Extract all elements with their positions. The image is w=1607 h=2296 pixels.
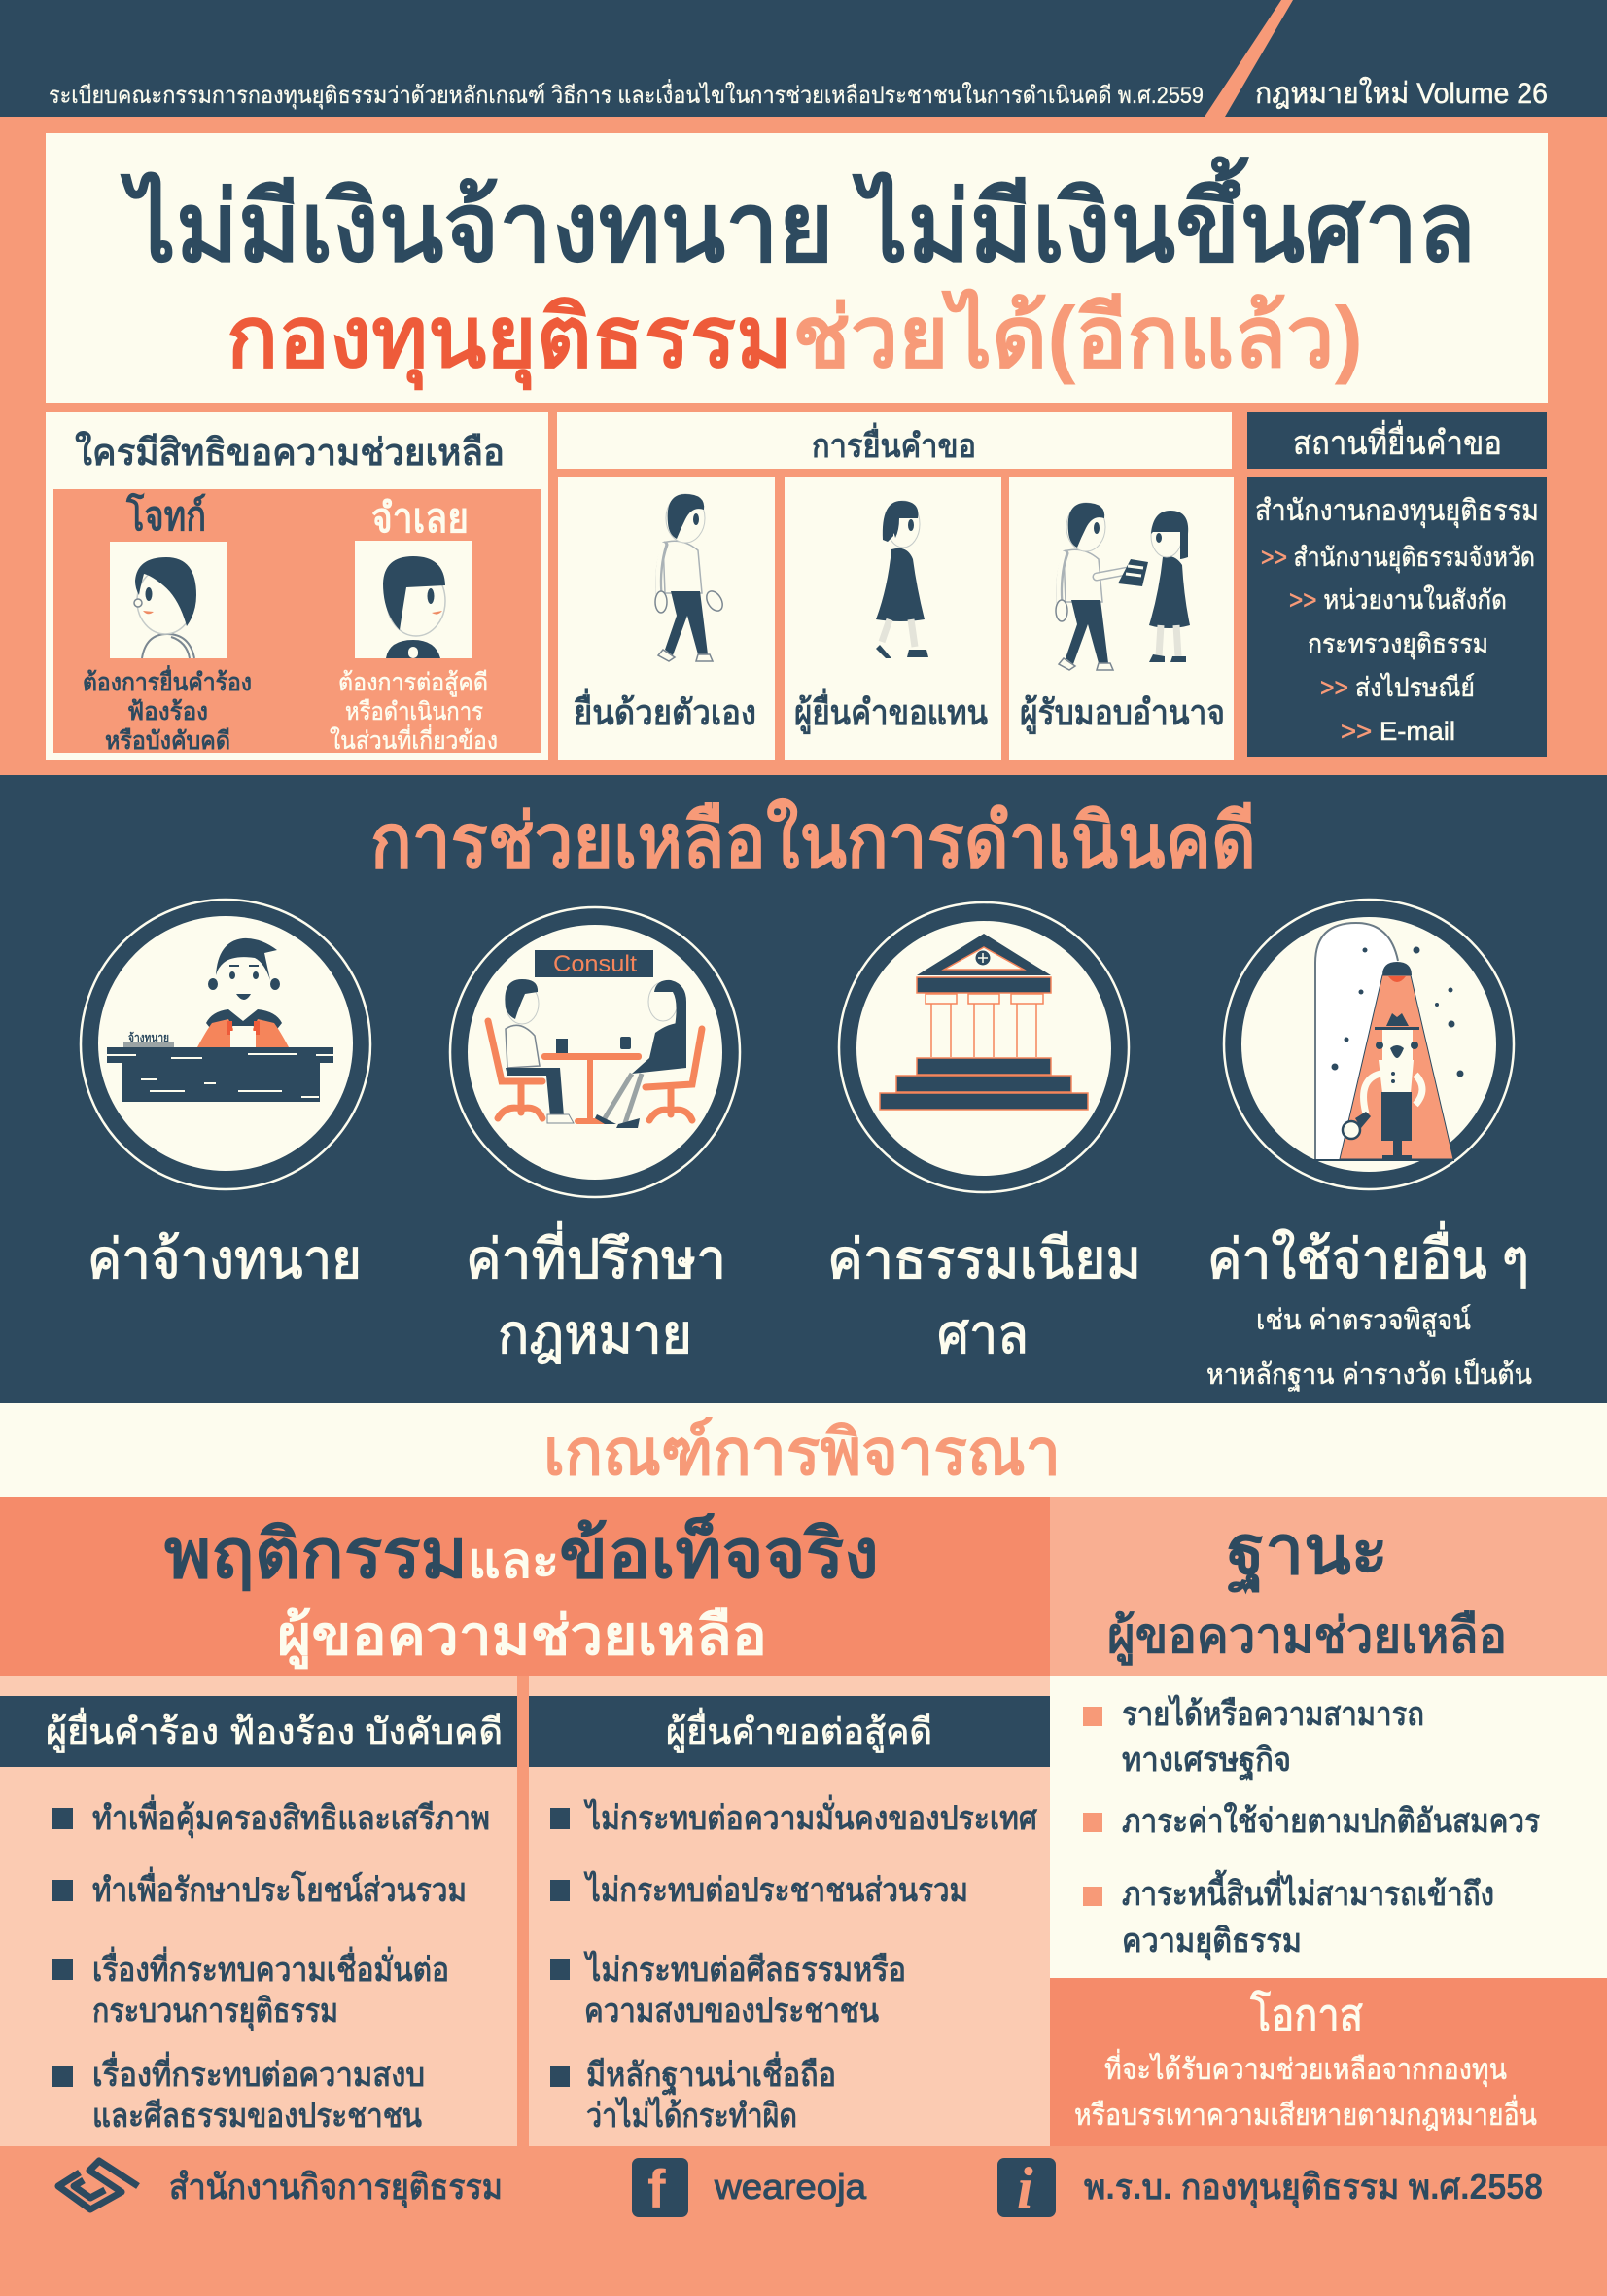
card: authorized person (1009, 477, 1234, 760)
defendant criteria list (583, 1794, 1037, 2135)
applicant bullets (52, 1808, 73, 2087)
panel: behaviour and facts heading: พฤติกรรม และข้อเท็จจริง (164, 1512, 879, 1592)
label: other expenses: เช่น ค่าตรวจพิสูจน์ (1256, 1304, 1471, 1337)
label: court fee (827, 1228, 1141, 1364)
title line 1: ไม่มีเงินจ้างทนาย ไม่มีเงินขึ้นศาล (120, 156, 1476, 282)
location list: >> หน่วยงานในสังกัด (1289, 584, 1507, 615)
location list: สำนักงานกองทุนยุติธรรม (1255, 495, 1539, 529)
applicant list: กระบวนการยุติธรรม (92, 1993, 338, 2031)
label: legal advisor fee (466, 1221, 726, 1364)
status list: รายได้หรือความสามารถ (1122, 1694, 1424, 1733)
defendant criteria list: ไม่กระทบต่อความมั่นคงของประเทศ (583, 1794, 1037, 1837)
label: legal advisor fee: ค่าที่ปรึกษา (466, 1221, 726, 1289)
opportunity heading: โอกาส (1250, 1990, 1363, 2040)
header volume label: กฎหมายใหม่ Volume 26 (1255, 77, 1548, 110)
icon: detective under lamp (1224, 900, 1514, 1189)
applicant list: ทำเพื่อรักษาประโยชน์ส่วนรวม (92, 1866, 467, 1909)
defendant criteria list: ว่าไม่ได้กระทำผิด (586, 2096, 797, 2135)
icon: info (997, 2156, 1056, 2220)
label: other expenses (1206, 1221, 1532, 1392)
nameplate text: จ้างทนาย (128, 1031, 169, 1044)
panel: criteria heading (0, 1403, 1607, 1497)
plaintiff description (83, 665, 252, 755)
defendant description: ในส่วนที่เกี่ยวข้อง (330, 724, 498, 755)
card 1 label: ยื่นด้วยตัวเอง (574, 688, 756, 732)
icon: courthouse (839, 902, 1129, 1192)
panel: status heading: ผู้ขอความช่วยเหลือ (1107, 1608, 1507, 1666)
opportunity description: ที่จะได้รับความช่วยเหลือจากกองทุน (1104, 2049, 1507, 2088)
icon: facebook: f (647, 2158, 666, 2219)
status list: ความยุติธรรม (1122, 1923, 1302, 1961)
footer facebook name: weareoja (714, 2167, 867, 2207)
applicant list (92, 1794, 490, 2135)
status list: ทางเศรษฐกิจ (1122, 1742, 1291, 1782)
label: other expenses: ค่าใช้จ่ายอื่น ๆ (1207, 1221, 1529, 1289)
applicant heading: ผู้ยื่นคำร้อง ฟ้องร้อง บังคับคดี (46, 1708, 503, 1753)
panel: opportunity (1050, 1978, 1607, 2146)
header regulation text: ระเบียบคณะกรรมการกองทุนยุติธรรมว่าด้วยหลักเกณฑ์ วิธีการ และเงื่อนไขในการช่วยเหลือประชาชนในการดำเนินคดี พ.ศ.2559 (49, 79, 1204, 110)
icon: man handing document to woman (1056, 503, 1190, 670)
location list (1255, 495, 1539, 746)
card: submit on behalf (785, 477, 1001, 760)
panel: status heading: ฐานะ (1227, 1512, 1388, 1594)
status list: ภาระหนี้สินที่ไม่สามารถเข้าถึง (1122, 1869, 1494, 1913)
status list: ภาระค่าใช้จ่ายตามปกติอันสมควร (1122, 1801, 1541, 1840)
panel: defendant criteria (529, 1676, 1050, 2146)
panel: where to file (1247, 412, 1547, 757)
consult sign text: Consult (553, 951, 637, 977)
panel: criteria heading: เกณฑ์การพิจารณา (543, 1416, 1061, 1488)
defendant criteria list: มีหลักฐานน่าเชื่อถือ (586, 2051, 836, 2097)
icon: lawyer (81, 900, 370, 1189)
defendant criteria list: ความสงบของประชาชน (584, 1993, 879, 2030)
defendant criteria list: ไม่กระทบต่อประชาชนส่วนรวม (583, 1870, 968, 1909)
icon: facebook (632, 2158, 688, 2219)
panel: behaviour and facts heading: ผู้ขอความช่วยเหลือ (277, 1605, 767, 1670)
footer law reference: พ.ร.บ. กองทุนยุติธรรม พ.ศ.2558 (1084, 2167, 1543, 2209)
card 2 label: ผู้ยื่นคำขอแทน (794, 688, 988, 735)
plaintiff description: ฟ้องร้อง (127, 698, 208, 725)
applicant list: เรื่องที่กระทบความเชื่อมั่นต่อ (92, 1946, 449, 1989)
filing heading: การยื่นคำขอ (812, 422, 976, 465)
title line 2: กองทุนยุติธรรมช่วยได้(อีกแล้ว) (227, 289, 1363, 391)
label: court fee: ศาล (937, 1303, 1029, 1364)
defendant description: หรือดำเนินการ (345, 698, 483, 725)
icon: defendant portrait (355, 541, 472, 658)
location list: กระทรวงยุติธรรม (1308, 629, 1488, 660)
label: lawyer fee: ค่าจ้างทนาย (87, 1228, 362, 1289)
label: court fee: ค่าธรรมเนียม (827, 1228, 1141, 1289)
status bullets (1083, 1707, 1102, 1906)
location list: >> ส่งไปรษณีย์ (1320, 672, 1475, 702)
plaintiff description: ต้องการยื่นคำร้อง (83, 665, 252, 696)
icon: info: i (1017, 2156, 1033, 2220)
panel: status criteria (1050, 1676, 1607, 1978)
panel: behaviour and facts heading (0, 1497, 1050, 1676)
location list: >> สำนักงานยุติธรรมจังหวัด (1261, 543, 1535, 574)
defendant description: ต้องการต่อสู้คดี (338, 669, 488, 697)
location list: >> E-mail (1341, 717, 1455, 746)
legal assistance heading: การช่วยเหลือในการดำเนินคดี (370, 797, 1256, 884)
defendant heading: จำเลย (371, 495, 469, 541)
location heading: สถานที่ยื่นคำขอ (1293, 420, 1502, 462)
applicant list: เรื่องที่กระทบต่อความสงบ (92, 2051, 425, 2094)
defendant criteria bullets (550, 1808, 570, 2087)
opportunity description (1074, 2049, 1537, 2132)
panel: legal assistance (0, 775, 1607, 1403)
header bar (0, 0, 1607, 117)
plaintiff heading: โจทก์ (125, 492, 206, 539)
title panel (46, 133, 1548, 403)
opportunity description: หรือบรรเทาความเสียหายตามกฎหมายอื่น (1074, 2095, 1537, 2132)
status list (1122, 1694, 1541, 1961)
eligibility heading: ใครมีสิทธิขอความช่วยเหลือ (75, 431, 505, 474)
card 3 label: ผู้รับมอบอำนาจ (1020, 692, 1225, 735)
icon: office logo (58, 2161, 138, 2209)
label: legal advisor fee: กฎหมาย (498, 1303, 692, 1364)
defendant criteria heading: ผู้ยื่นคำขอต่อสู้คดี (666, 1708, 932, 1753)
defendant criteria list: ไม่กระทบต่อศีลธรรมหรือ (583, 1950, 906, 1989)
icon: legal consultation (450, 907, 740, 1197)
label: other expenses: หาหลักฐาน ค่ารางวัด เป็นต้น (1206, 1357, 1532, 1392)
applicant list: ทำเพื่อคุ้มครองสิทธิและเสรีภาพ (92, 1794, 490, 1839)
icon: walking man (655, 494, 726, 661)
panel: applicant criteria (0, 1676, 517, 2146)
panel: status heading (1050, 1497, 1607, 1676)
icon: walking woman (876, 501, 928, 658)
footer (58, 2156, 1543, 2220)
defendant description (330, 669, 498, 755)
plaintiff description: หรือบังคับคดี (105, 727, 230, 755)
footer office name: สำนักงานกิจการยุติธรรม (169, 2167, 503, 2209)
icon: plaintiff portrait (110, 542, 227, 658)
applicant list: และศีลธรรมของประชาชน (92, 2098, 422, 2135)
panel: filing a request (557, 412, 1234, 760)
panel: who is eligible (46, 412, 548, 760)
card: file in person (558, 477, 775, 760)
